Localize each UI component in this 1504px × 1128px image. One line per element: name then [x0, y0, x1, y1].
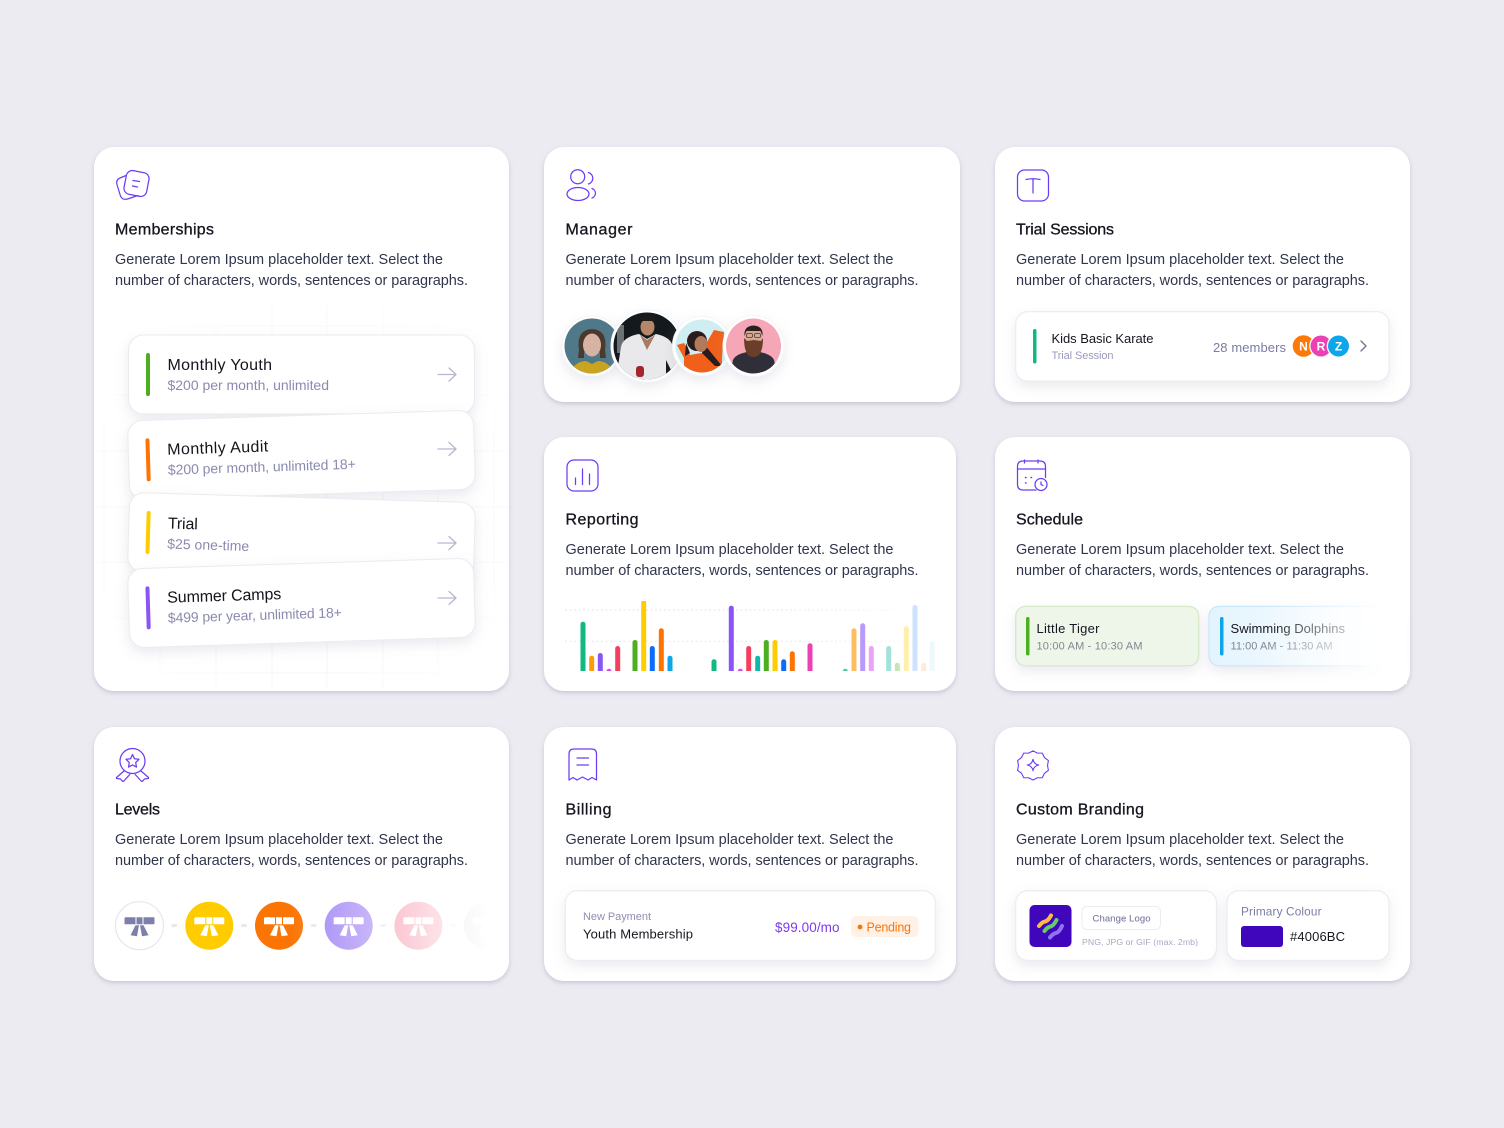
description: memberships: number of characters, words, sentences or paragraphs.	[115, 273, 468, 289]
fade cover: schedule	[1385, 600, 1407, 684]
event: swimming dolphins	[1209, 606, 1399, 666]
description: manager	[566, 252, 918, 289]
row: new payment: Youth Membership	[583, 926, 693, 942]
avatar: bearded man	[723, 316, 784, 376]
primary colour box	[1227, 891, 1389, 960]
panel: custom branding	[995, 727, 1410, 981]
row: new payment: New Payment	[583, 911, 651, 923]
logo upload box	[1016, 891, 1216, 960]
description: custom branding	[1016, 832, 1369, 869]
panel: levels	[94, 727, 512, 981]
row: monthly youth: Monthly Youth	[168, 357, 272, 374]
card: levels	[94, 727, 509, 981]
row: trial: $25 one-time	[167, 536, 250, 554]
row: trial: Trial	[168, 516, 198, 533]
bar chart	[565, 601, 935, 678]
description: trial sessions: number of characters, words, sentences or paragraphs.	[1016, 273, 1369, 289]
level: pink belt	[394, 902, 442, 950]
member badge: R	[1309, 334, 1333, 358]
description: schedule: number of characters, words, sentences or paragraphs.	[1016, 563, 1369, 579]
level: faded belt	[464, 902, 512, 950]
description: billing: number of characters, words, sentences or paragraphs.	[566, 853, 918, 869]
description: custom branding: number of characters, words, sentences or paragraphs.	[1016, 853, 1369, 869]
fade overlay: schedule	[1265, 600, 1385, 684]
description: memberships: Generate Lorem Ipsum placeholder text. Select the	[115, 252, 443, 268]
event: little tiger	[1016, 606, 1199, 666]
logo	[1030, 905, 1072, 947]
row: monthly youth	[128, 335, 474, 414]
avatar: woman in orange sweater	[672, 316, 732, 376]
panel: manager	[544, 147, 960, 402]
heading: levels: Levels	[115, 802, 160, 819]
arrow: monthly audit	[438, 442, 456, 456]
avatars: team photos	[560, 310, 784, 382]
description: custom branding: Generate Lorem Ipsum placeholder text. Select the	[1016, 832, 1344, 848]
heading: schedule: Schedule	[1016, 512, 1083, 529]
card: memberships	[94, 147, 509, 691]
heading: trial sessions: Trial Sessions	[1016, 222, 1114, 239]
description: trial sessions: Generate Lorem Ipsum placeholder text. Select the	[1016, 252, 1344, 268]
card: manager	[544, 147, 960, 402]
description: billing	[566, 832, 918, 869]
event: little tiger: 10:00 AM - 10:30 AM	[1036, 640, 1142, 652]
card: trial sessions	[995, 147, 1410, 402]
panel: reporting	[544, 437, 956, 691]
panel: schedule	[995, 437, 1410, 691]
level: yellow belt	[185, 902, 233, 950]
member count: 28 members	[1213, 340, 1286, 355]
description: reporting: number of characters, words, sentences or paragraphs.	[566, 563, 918, 579]
description: schedule: Generate Lorem Ipsum placeholder text. Select the	[1016, 542, 1344, 558]
icon: reporting	[567, 460, 598, 491]
icon: custom branding	[1018, 751, 1048, 780]
member badge: N	[1293, 335, 1314, 357]
panel: memberships	[94, 147, 509, 691]
level: white belt	[116, 902, 164, 950]
description: billing: Generate Lorem Ipsum placeholder text. Select the	[566, 832, 894, 848]
upload hint: PNG, JPG or GIF (max. 2mb)	[1082, 937, 1198, 947]
panel: billing	[544, 727, 956, 981]
panel: trial sessions	[995, 147, 1410, 402]
heading: memberships: Memberships	[115, 222, 214, 239]
description: trial sessions	[1016, 252, 1369, 289]
icon: billing	[569, 749, 596, 780]
row: trial	[127, 492, 476, 582]
arrow: monthly youth	[438, 368, 456, 381]
member badge: R: R	[1317, 340, 1326, 354]
row: monthly audit: Monthly Audit	[167, 439, 269, 459]
event: little tiger: Little Tiger	[1036, 621, 1100, 636]
description: reporting	[566, 542, 918, 579]
button: change logo: Change Logo	[1092, 914, 1150, 924]
description: reporting: Generate Lorem Ipsum placeholder text. Select the	[566, 542, 894, 558]
card: custom branding	[995, 727, 1410, 981]
icon: levels	[116, 748, 149, 781]
colour swatch	[1241, 926, 1283, 947]
member badge: N: N	[1299, 340, 1308, 354]
description: manager: number of characters, words, sentences or paragraphs.	[566, 273, 918, 289]
row: summer camps	[127, 558, 476, 648]
chevron	[1361, 341, 1366, 351]
heading: custom branding: Custom Branding	[1016, 802, 1144, 819]
row: new payment	[565, 891, 935, 960]
status pill: pending	[851, 916, 918, 937]
icon: schedule	[1018, 460, 1047, 490]
colour value: #4006BC	[1290, 929, 1345, 944]
event: swimming dolphins: Swimming Dolphins	[1230, 621, 1346, 636]
avatar: karate man in white gi	[611, 310, 683, 382]
arrow: summer camps	[438, 592, 456, 604]
member badge: Z: Z	[1335, 340, 1342, 354]
button: change logo	[1082, 906, 1160, 930]
row: summer camps: Summer Camps	[167, 586, 281, 607]
description: schedule	[1016, 542, 1369, 579]
icon: manager	[567, 170, 595, 200]
description: levels	[115, 832, 468, 869]
card: reporting	[544, 437, 956, 691]
primary colour box: Primary Colour	[1241, 904, 1322, 918]
belt levels	[115, 901, 442, 950]
member badge: Z	[1327, 334, 1350, 358]
heading: reporting: Reporting	[566, 512, 638, 529]
heading: billing: Billing	[566, 802, 612, 819]
connectors	[173, 924, 455, 927]
description: memberships	[115, 252, 468, 289]
row: kids basic karate: Kids Basic Karate	[1052, 331, 1154, 346]
description: levels: number of characters, words, sentences or paragraphs.	[115, 853, 468, 869]
description: levels: Generate Lorem Ipsum placeholder text. Select the	[115, 832, 443, 848]
description: manager: Generate Lorem Ipsum placeholder text. Select the	[566, 252, 894, 268]
row: kids basic karate	[1016, 312, 1389, 381]
avatar: woman in yellow shirt	[560, 315, 624, 377]
level: orange belt	[255, 902, 303, 950]
price: $99.00/mo	[775, 920, 840, 935]
row: summer camps: $499 per year, unlimited 18+	[168, 604, 342, 626]
arrow: trial	[438, 536, 456, 550]
row: monthly youth: $200 per month, unlimited	[168, 377, 329, 393]
row: monthly audit	[127, 410, 476, 500]
icon: memberships	[117, 170, 150, 199]
card: billing	[544, 727, 956, 981]
icon: trial sessions	[1018, 170, 1048, 201]
status pill: pending: Pending	[866, 920, 911, 934]
background grid	[216, 414, 474, 674]
row: monthly audit: $200 per month, unlimited 18+	[168, 456, 356, 478]
level: purple belt	[325, 902, 373, 950]
row: kids basic karate: Trial Session	[1052, 350, 1114, 362]
fade overlay: levels	[290, 898, 488, 954]
card: schedule	[995, 437, 1410, 691]
event: swimming dolphins: 11:00 AM - 11:30 AM	[1230, 640, 1332, 652]
heading: manager: Manager	[566, 222, 633, 239]
